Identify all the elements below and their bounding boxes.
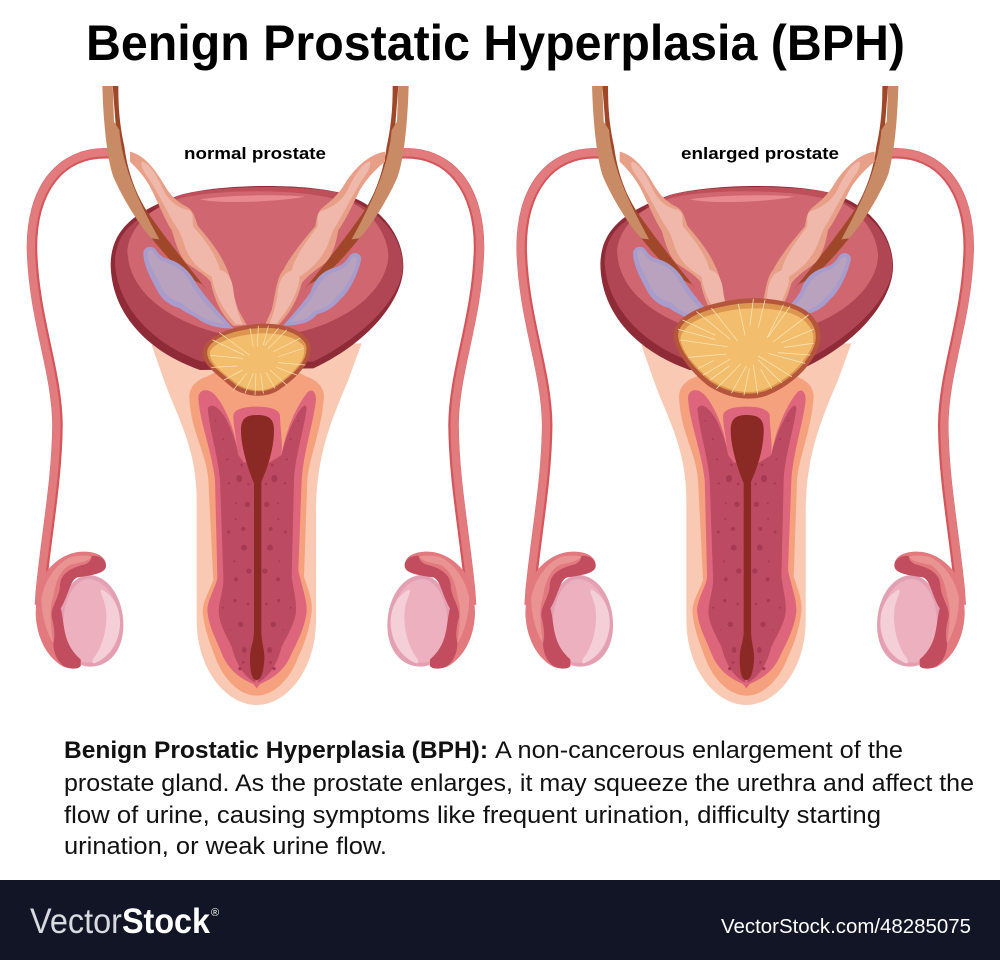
footer bar (0, 880, 1000, 960)
panel: enlarged prostate diagram (521, 86, 970, 705)
label: enlarged prostate: enlarged prostate (681, 145, 839, 163)
right duct tube (889, 152, 970, 605)
description text block: flow of urine, causing symptoms like frequent urination, difficulty starting (64, 802, 881, 829)
VectorStock logo (30, 902, 219, 941)
brown ureters (592, 86, 898, 289)
title: Benign Prostatic Hyperplasia (BPH) (86, 15, 905, 71)
seminal vesicles (633, 247, 851, 328)
normal prostate gland (202, 324, 311, 396)
bladder (111, 186, 403, 370)
shaft with urethra (641, 343, 851, 705)
left testis (36, 552, 123, 669)
seminal ducts (620, 152, 875, 326)
VectorStock logo: ® (211, 907, 219, 919)
brown ureters (102, 86, 409, 289)
right testis (877, 552, 965, 669)
shaft with urethra (152, 343, 362, 705)
description text block: prostate gland. As the prostate enlarges, it may squeeze the urethra and affect the (64, 770, 974, 797)
seminal ducts (130, 152, 385, 326)
VectorStock logo: Stock (122, 902, 210, 941)
left duct tube (521, 152, 602, 605)
seminal vesicles (143, 247, 361, 328)
description text block: Benign Prostatic Hyperplasia (BPH): (64, 737, 488, 764)
right duct tube (399, 152, 480, 605)
description text block: urination, or weak urine flow. (64, 833, 387, 860)
VectorStock logo: Vector (30, 902, 122, 941)
right testis (387, 552, 475, 669)
enlarged prostate gland (673, 298, 821, 399)
left duct tube (31, 152, 112, 605)
label: normal prostate: normal prostate (184, 145, 326, 163)
bladder (600, 186, 893, 370)
description text block (64, 737, 974, 860)
panel: normal prostate diagram (31, 86, 480, 705)
left testis (525, 552, 613, 669)
image id: VectorStock.com/48285075 (721, 916, 971, 938)
description text block: A non-cancerous enlargement of the (495, 737, 903, 764)
